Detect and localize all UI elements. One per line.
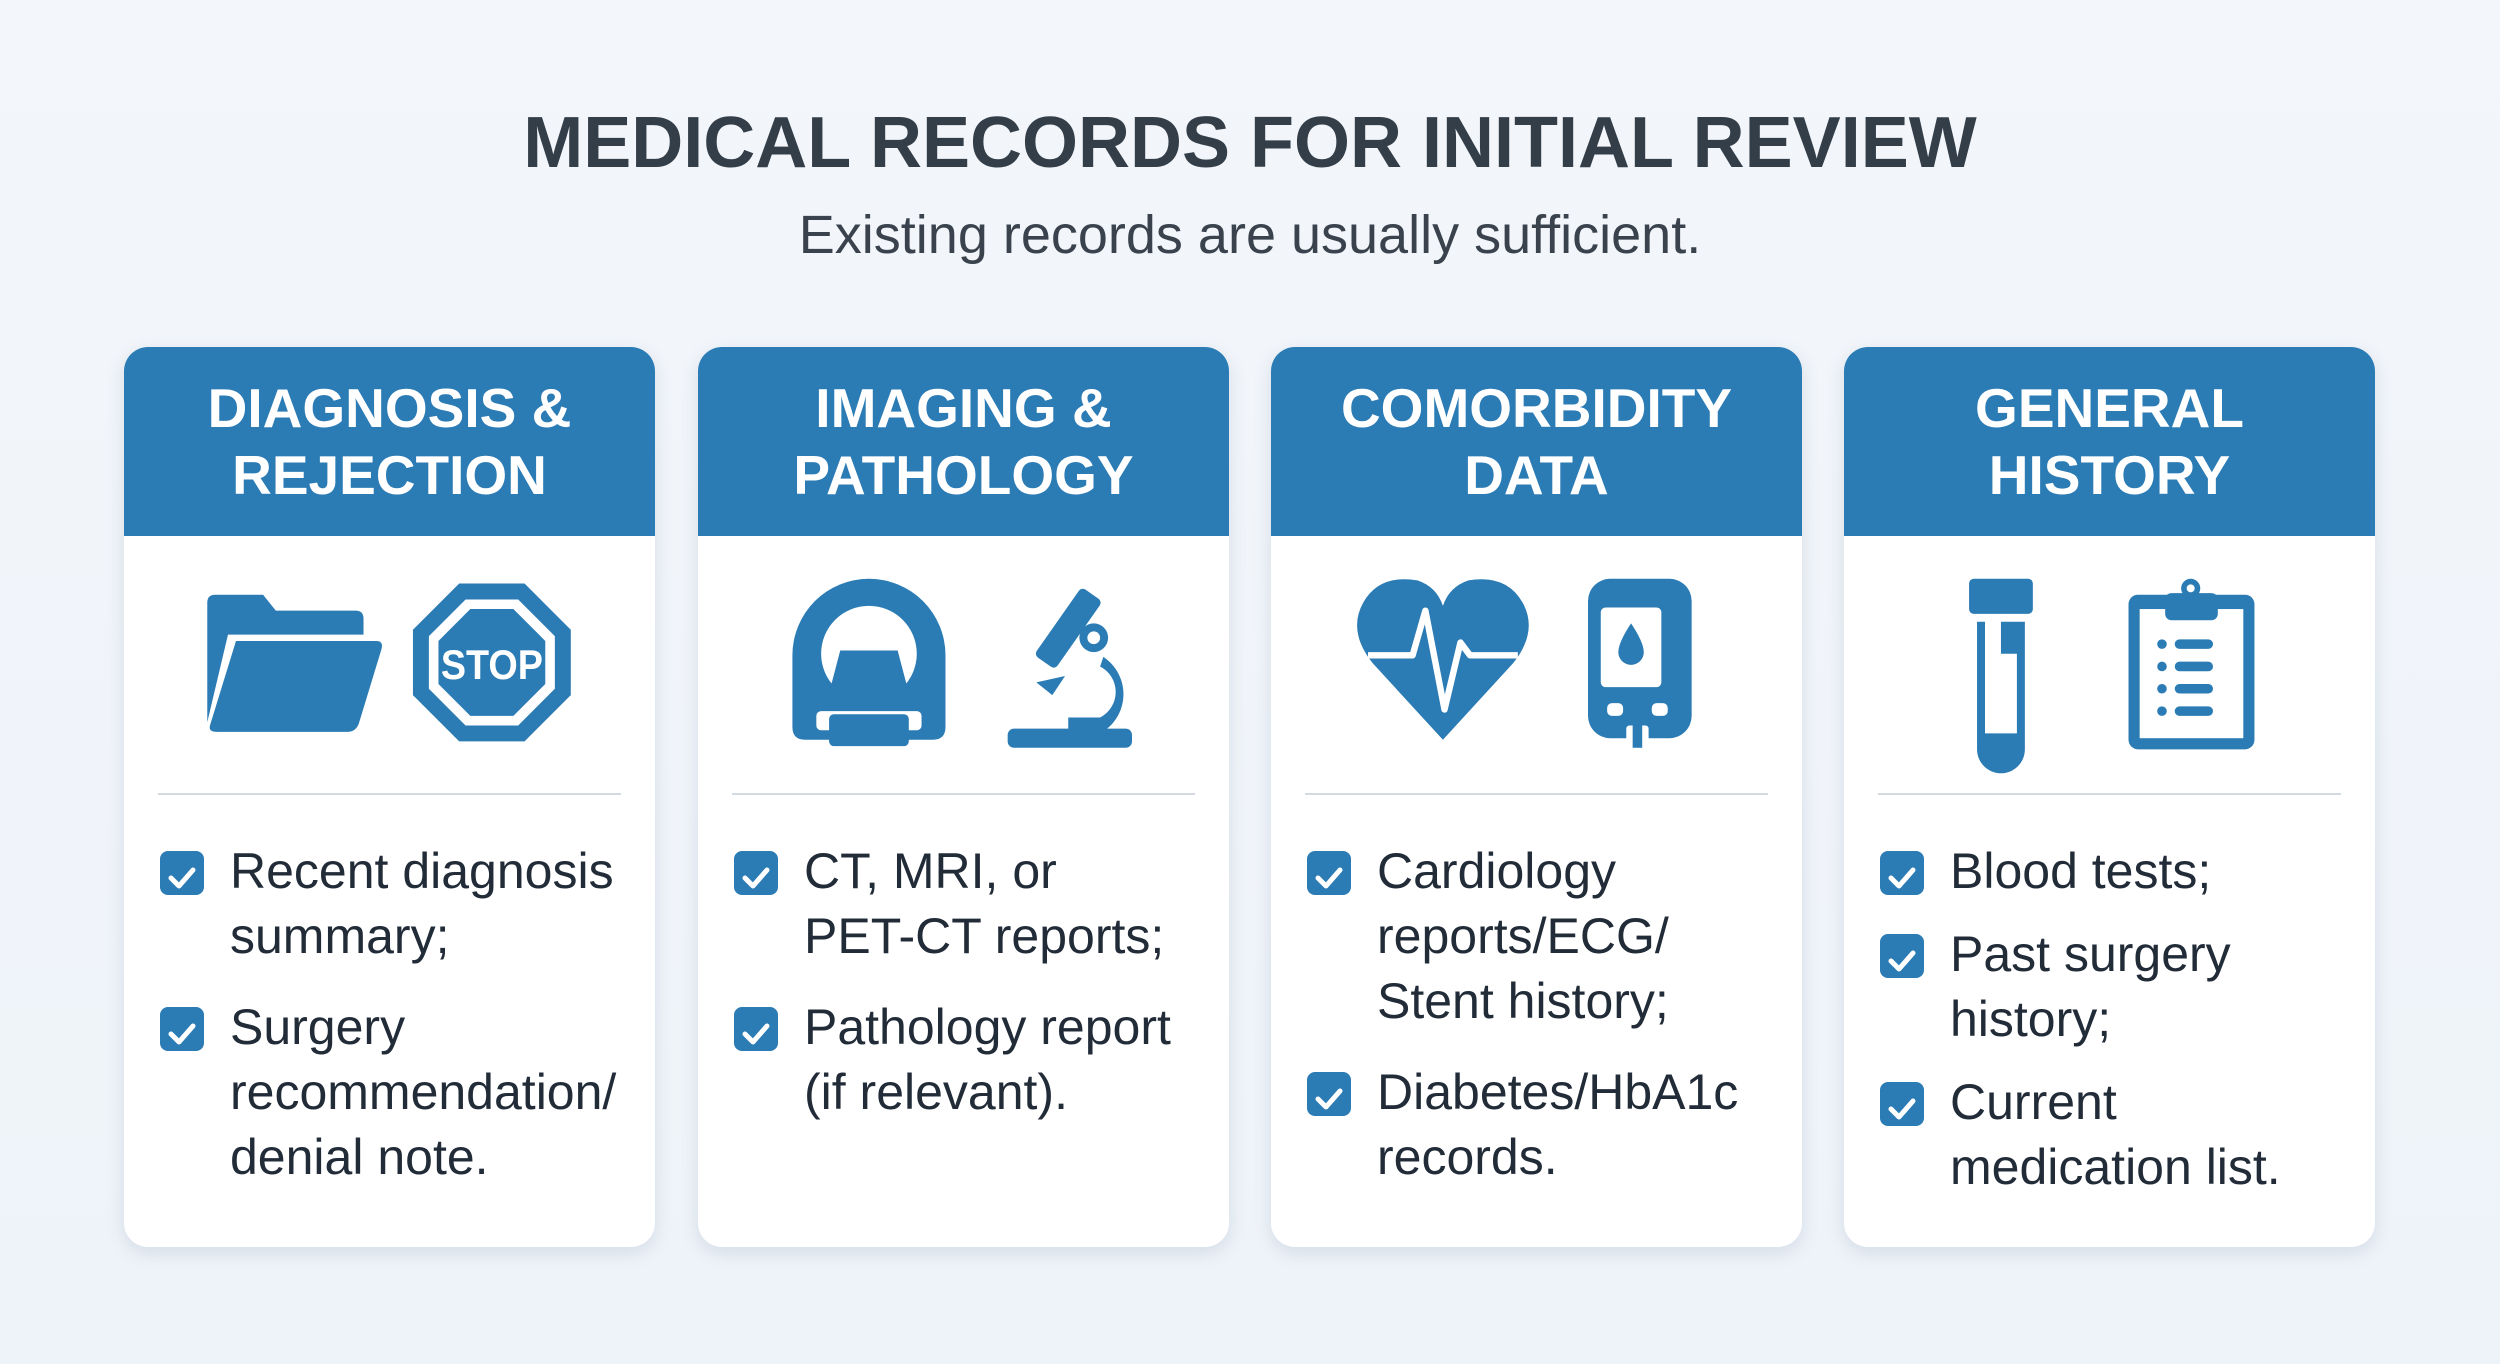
icon: stop sign [413,584,571,741]
heading [698,347,1229,536]
heading: REJECTION [232,444,547,506]
checklist: reports/ECG/ [1377,908,1669,964]
heading: GENERAL [1975,376,2244,438]
panel: comorbidity data [1271,347,1802,1247]
checklist: Cardiology [1377,843,1616,899]
heading: IMAGING & [815,376,1112,438]
heading: DIAGNOSIS & [208,376,571,438]
checklist [160,843,616,1185]
icon: test tube [1969,579,2033,773]
checklist: Stent history; [1377,973,1669,1029]
checklist: Pathology report (if relevant). [804,999,1171,1120]
subtitle: Existing records are usually sufficient. [799,205,1701,265]
checklist: CT, MRI, or [804,843,1057,899]
heading: DATA [1464,444,1609,506]
heading [124,347,655,536]
heading: HISTORY [1989,444,2230,506]
icon: heart with pulse [1357,579,1529,740]
icon: clipboard [2129,579,2254,749]
checklist: Blood tests; [1950,843,2211,899]
title: MEDICAL RECORDS FOR INITIAL REVIEW [523,103,1977,183]
heading: PATHOLOGY [793,444,1134,506]
icon: microscope [1008,587,1132,748]
icon: stop sign: STOP [441,641,543,688]
checklist: Diabetes/HbA1c [1377,1064,1738,1120]
checklist: Surgery recommendation/ denial note. [230,999,616,1185]
checklist: Past surgery history; [1950,926,2231,1047]
checklist [1880,843,2281,1195]
panel: imaging & pathology [698,347,1229,1247]
icon: scanner [792,579,945,746]
checklist [734,843,1171,1120]
heading: COMORBIDITY [1341,376,1732,438]
checklist: Recent diagnosis summary; [230,843,614,964]
checklist: Current medication list. [1950,1074,2281,1195]
panel: general history [1844,347,2375,1247]
icon: folder [207,595,382,732]
checklist: PET-CT reports; [804,908,1164,964]
heading [1271,347,1802,536]
panel: diagnosis & rejection [124,347,655,1247]
checklist: records. [1377,1129,1558,1185]
icon: glucometer [1588,579,1692,748]
checklist [1307,843,1738,1185]
heading [1844,347,2375,536]
